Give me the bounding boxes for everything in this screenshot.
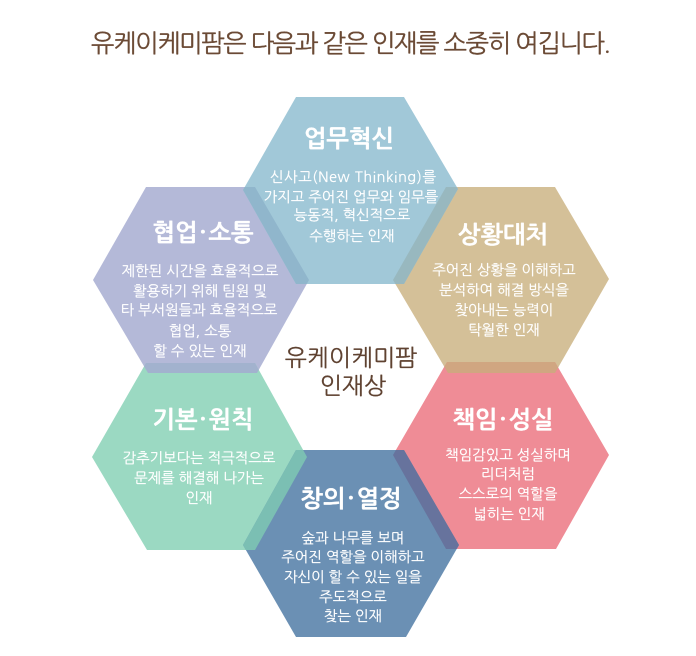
hexagon: 협업·소통 (93, 187, 309, 373)
hexagon: 상황대처 (393, 187, 609, 373)
panel: 상황대처 (393, 187, 609, 373)
panel: 업무혁신 (243, 97, 458, 284)
text block: 기본·원칙 description (123, 451, 276, 506)
heading: 협업·소통: 협업·소통 (152, 220, 254, 245)
text block: 업무혁신 description: 수행하는 인재 (309, 228, 395, 244)
text block: 협업·소통 description (121, 263, 279, 359)
overlap: 협업·소통 and 기본·원칙 (144, 363, 259, 373)
text block: 협업·소통 description: 타 부서원들과 효율적으로 (121, 302, 278, 318)
overlap: 책임·성실 and 창의·열정 (393, 450, 459, 549)
panel: 기본·원칙 (92, 363, 307, 550)
text block: 협업·소통 description: 활용하기 위해 팀원 및 (133, 284, 267, 299)
text block: 기본·원칙 description: 문제를 해결해 나가는 (134, 470, 264, 486)
text block: 책임·성실 description (445, 448, 571, 522)
text block: 상황대처 description: 주어진 상황을 이해하고 (432, 262, 576, 278)
center label (285, 346, 417, 398)
text block: 창의·열정 description (281, 530, 425, 624)
text block: 창의·열정 description: 주어진 역할을 이해하고 (281, 549, 425, 565)
text block: 책임·성실 description: 리더처럼 (481, 467, 535, 482)
panel: 협업·소통 (93, 187, 309, 373)
text block: 협업·소통 description: 협업, 소통 (169, 324, 232, 339)
overlap: 상황대처 and 책임·성실 (444, 362, 558, 373)
text block: 상황대처 description: 찾아내는 능력이 (455, 303, 553, 318)
text block: 협업·소통 description: 할 수 있는 인재 (153, 343, 247, 359)
text block: 책임·성실 description: 스스로의 역할을 (459, 486, 558, 502)
text block: 업무혁신 description: 가지고 주어진 업무와 임무를 (264, 190, 439, 205)
heading: 상황대처: 상황대처 (458, 222, 548, 247)
panel: 창의·열정 (243, 450, 459, 637)
text block: 창의·열정 description: 찾는 인재 (324, 609, 382, 624)
text block: 창의·열정 description: 자신이 할 수 있는 일을 (284, 569, 422, 585)
overlap: 상황대처 and 업무혁신 (393, 187, 458, 284)
text block: 기본·원칙 description: 감추기보다는 적극적으로 (123, 451, 276, 466)
hexagon: 책임·성실 (393, 362, 609, 549)
text block: 상황대처 description (432, 262, 576, 338)
center label: 유케이케미팜 (285, 346, 417, 370)
text block: 협업·소통 description: 제한된 시간을 효율적으로 (122, 263, 279, 279)
text block: 창의·열정 description: 숲과 나무를 보며 (302, 530, 404, 546)
overlap: 기본·원칙 and 창의·열정 (243, 450, 307, 550)
text block: 업무혁신 description: 신사고(New Thinking)를 (270, 170, 436, 185)
text block: 기본·원칙 description: 인재 (185, 491, 213, 506)
title: 유케이케미팜은 다음과 같은 인재를 소중히 여깁니다. (91, 31, 611, 56)
text block: 상황대처 description: 탁월한 인재 (468, 323, 540, 338)
text block: 책임·성실 description: 책임감있고 성실하며 (445, 448, 571, 463)
hexagon: 업무혁신 (243, 97, 458, 284)
panel: 책임·성실 (393, 362, 609, 549)
overlap: 협업·소통 and 업무혁신 (243, 187, 309, 284)
hexagon: 창의·열정 (243, 450, 459, 637)
hexagon: 기본·원칙 (92, 363, 307, 550)
heading: 업무혁신: 업무혁신 (304, 126, 394, 151)
text block: 창의·열정 description: 주도적으로 (319, 590, 387, 605)
text block: 책임·성실 description: 넓히는 인재 (473, 506, 545, 522)
heading: 기본·원칙: 기본·원칙 (152, 407, 254, 432)
text block: 상황대처 description: 분석하여 해결 방식을 (439, 282, 569, 298)
heading: 창의·열정: 창의·열정 (300, 486, 402, 511)
text block: 업무혁신 description: 능동적, 혁신적으로 (294, 207, 411, 223)
center label: 인재상 (320, 374, 386, 398)
heading: 책임·성실: 책임·성실 (452, 407, 554, 432)
text block: 업무혁신 description (264, 170, 439, 244)
